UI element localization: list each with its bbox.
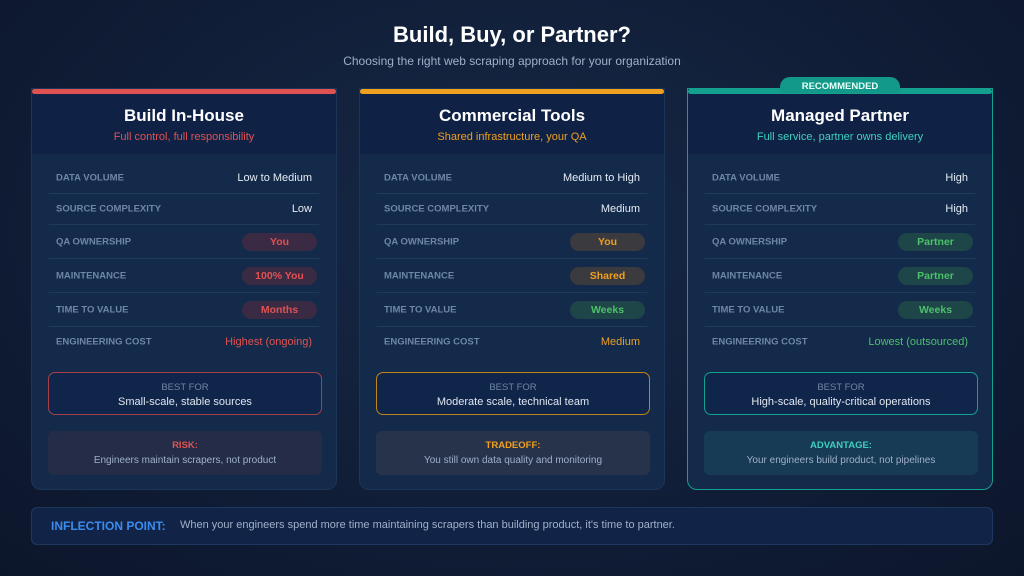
panel: commercial tools: Medium to High (563, 172, 640, 184)
best for box (48, 372, 322, 415)
recommended badge: RECOMMENDED (802, 81, 878, 92)
panel: managed partner: Lowest (outsourced) (868, 336, 968, 348)
heading: managed partner (688, 94, 992, 154)
best for box: Small-scale, stable sources (118, 396, 252, 408)
panel: managed partner: High (945, 172, 968, 184)
panel: commercial tools: Medium (601, 203, 640, 215)
heading: build in-house (32, 94, 336, 154)
panel: build in-house: Highest (ongoing) (225, 336, 312, 348)
panel: managed partner: High (945, 203, 968, 215)
inflection point bar: INFLECTION POINT: (51, 519, 166, 533)
heading: commercial tools: Shared infrastructure, your QA (437, 131, 587, 143)
inflection point bar (31, 507, 993, 545)
panel: build in-house: DATA VOLUME (56, 172, 124, 184)
tradeoff callout: You still own data quality and monitoring (424, 455, 602, 466)
risk callout (48, 431, 322, 475)
panel: managed partner: QA OWNERSHIP (712, 236, 787, 247)
heading: build in-house: Full control, full responsibility (114, 131, 254, 143)
risk callout: RISK: (172, 440, 198, 451)
panel: build in-house: SOURCE COMPLEXITY (56, 204, 161, 214)
panel: build in-house: ENGINEERING COST (56, 336, 152, 348)
panel: commercial tools: MAINTENANCE (384, 270, 454, 281)
panel: build in-house (31, 88, 337, 490)
panel: build in-house: Months (261, 304, 298, 316)
panel: build in-house: QA OWNERSHIP (56, 236, 131, 247)
panel: managed partner: TIME TO VALUE (712, 304, 784, 315)
heading: commercial tools (360, 94, 664, 154)
best for box: BEST FOR (489, 382, 537, 393)
panel: commercial tools: ENGINEERING COST (384, 336, 480, 348)
panel: build in-house: You (270, 236, 289, 248)
advantage callout (704, 431, 978, 475)
panel: managed partner: Partner (917, 236, 954, 248)
panel: commercial tools: QA OWNERSHIP (384, 236, 459, 247)
advantage callout: ADVANTAGE: (810, 440, 872, 451)
heading: managed partner: Full service, partner owns delivery (757, 131, 923, 143)
panel: commercial tools: You (598, 236, 617, 248)
panel: managed partner: MAINTENANCE (712, 270, 782, 281)
panel: commercial tools: SOURCE COMPLEXITY (384, 204, 489, 214)
panel: commercial tools (359, 88, 665, 490)
panel: build in-house: Low (292, 203, 312, 215)
best for box: BEST FOR (161, 382, 209, 393)
tradeoff callout: TRADEOFF: (486, 440, 540, 451)
panel: build in-house: TIME TO VALUE (56, 304, 128, 315)
panel: managed partner: Weeks (919, 304, 952, 316)
heading: commercial tools: Commercial Tools (439, 106, 585, 125)
heading: build in-house: Build In-House (124, 106, 244, 125)
subtitle: Choosing the right web scraping approach for your organization (343, 54, 681, 68)
panel: build in-house: MAINTENANCE (56, 270, 126, 281)
heading: managed partner: Managed Partner (771, 106, 909, 125)
panel: managed partner: Partner (917, 270, 954, 282)
advantage callout: Your engineers build product, not pipelines (747, 455, 935, 466)
panel: commercial tools: TIME TO VALUE (384, 304, 456, 315)
panel: commercial tools: DATA VOLUME (384, 172, 452, 184)
best for box: High-scale, quality-critical operations (751, 396, 931, 408)
best for box (376, 372, 650, 415)
panel: managed partner: ENGINEERING COST (712, 336, 808, 348)
panel: commercial tools: Medium (601, 336, 640, 348)
best for box (704, 372, 978, 415)
panel: managed partner (687, 88, 993, 490)
panel: managed partner: SOURCE COMPLEXITY (712, 204, 817, 214)
recommended badge (780, 77, 900, 93)
panel: build in-house: 100% You (255, 270, 304, 282)
panel: managed partner: DATA VOLUME (712, 172, 780, 184)
inflection point bar: When your engineers spend more time maintaining scrapers than building product, it's time to partner. (180, 519, 675, 531)
panel: commercial tools: Shared (590, 270, 625, 282)
title: Build, Buy, or Partner? (393, 22, 631, 47)
best for box: BEST FOR (817, 382, 865, 393)
best for box: Moderate scale, technical team (437, 396, 589, 408)
risk callout: Engineers maintain scrapers, not product (94, 455, 276, 466)
panel: build in-house: Low to Medium (237, 172, 312, 184)
tradeoff callout (376, 431, 650, 475)
panel: commercial tools: Weeks (591, 304, 624, 316)
